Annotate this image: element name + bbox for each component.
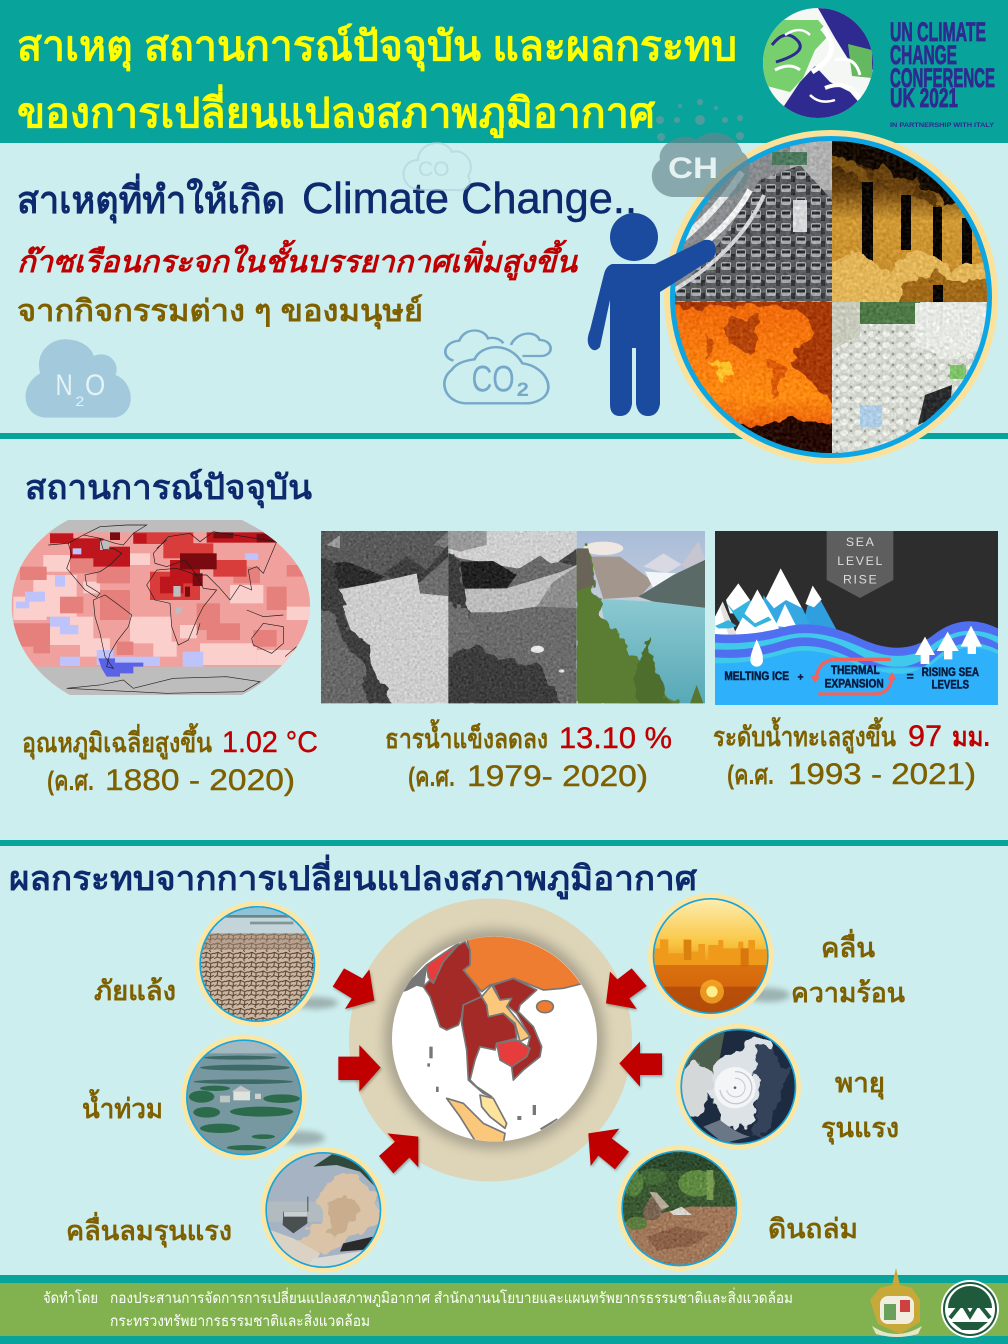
label: heatwave [791, 928, 906, 1008]
country: China [463, 933, 583, 992]
country: India edge [404, 964, 426, 992]
heading: current situation: สถานการณ์ปัจจุบัน [25, 468, 312, 509]
arrow: middle right [619, 1042, 662, 1087]
caption: glaciers: 13.10 % [559, 722, 672, 755]
arrow: bottom left [379, 1133, 418, 1173]
COP26 wordmark: UK 2021 [890, 83, 958, 113]
country: Myanmar [423, 942, 482, 1030]
section divider bars [0, 433, 1008, 846]
caption: sea level: มม. [952, 722, 990, 752]
caption: temperature: 1880 - 2020) [105, 764, 295, 797]
icon: person pointing [588, 213, 716, 416]
gray no-data bands [36, 520, 280, 695]
country: Cambodia [497, 1040, 530, 1067]
icon: N2O cloud: 2 [75, 394, 84, 410]
icon: faint CO2 cloud: CO [418, 158, 450, 181]
central map of Southeast Asia [333, 898, 662, 1182]
footer credit text: กองประสานการจัดการการเปลี่ยนแปลงสภาพภูมิอากาศ สำนักงานนโยบายและแผนทรัพยากรธรรมชาติและสิ่งแวดล้อม [110, 1287, 793, 1307]
label: drought: ภัยแล้ง [94, 976, 176, 1006]
label: storm surge: คลื่นลมรุนแรง [66, 1211, 232, 1248]
caption: sea level [713, 716, 990, 791]
COP26 wordmark: IN PARTNERSHIP WITH ITALY [890, 122, 995, 129]
icon: rising arrows [915, 626, 982, 664]
title: ของการเปลี่ยนแปลงสภาพภูมิอากาศ [17, 84, 656, 139]
photo circle: typhoon [676, 1024, 801, 1149]
label: heatwave: ความร้อน [791, 978, 906, 1008]
diagram labels: EXPANSION [825, 676, 884, 690]
icon: ministry emblem [870, 1268, 922, 1337]
badge: sea level rise: LEVEL [837, 554, 884, 568]
red arrows [333, 968, 662, 1173]
label: severe storm: รุนแรง [821, 1113, 899, 1145]
caption: sea level: ระดับน้ำทะเลสูงขึ้น [713, 716, 896, 754]
photo: glacier 2 [445, 531, 580, 707]
label: severe storm [821, 1068, 899, 1145]
photo: wildfire [675, 302, 832, 453]
footer credit text [43, 1287, 793, 1330]
badge: sea level rise: SEA [846, 535, 876, 549]
subheading: human activities: จากกิจกรรมต่าง ๆ ของมนุษย์ [17, 294, 423, 330]
icon: COP26 globe [763, 8, 873, 118]
diagram labels: MELTING ICE [724, 669, 789, 683]
label: heatwave: คลื่น [821, 928, 876, 963]
caption: glaciers: 1979- 2020) [467, 760, 648, 793]
badge: sea level rise [827, 531, 893, 598]
badge: sea level rise: RISE [843, 572, 878, 586]
photo: factory smoke [832, 141, 987, 302]
label: landslide: ดินถล่ม [768, 1214, 858, 1244]
subheading: greenhouse gases: ก๊าซเรือนกระจกในชั้นบรรยากาศเพิ่มสูงขึ้น [17, 239, 579, 281]
country: Hainan [537, 1001, 553, 1013]
heading: causes [17, 173, 637, 224]
caption: sea level: 97 [908, 720, 942, 753]
title [17, 23, 737, 139]
icon: water drop [750, 639, 763, 667]
label: severe storm: พายุ [835, 1068, 885, 1100]
photo circle: drought [195, 901, 320, 1027]
icon: office seal [941, 1280, 999, 1338]
photo circle: flood [181, 1035, 307, 1160]
footer band [0, 1275, 1008, 1344]
heading: causes: สาเหตุที่ทำให้เกิด [17, 173, 285, 224]
icon: thermal expansion arrows [816, 659, 892, 694]
footer credit text: กระทรวงทรัพยากรธรรมชาติและสิ่งแวดล้อม [110, 1310, 370, 1330]
diagram labels [724, 663, 979, 692]
photo: plastic waste [832, 302, 987, 453]
country: Vietnam [493, 978, 542, 1080]
title: สาเหตุ สถานการณ์ปัจจุบัน และผลกระทบ [17, 23, 737, 72]
photo: traffic jam [660, 140, 832, 302]
COP26 wordmark: CHANGE [890, 40, 957, 70]
diagram labels: = [907, 670, 914, 684]
chart: world temperature anomaly map [10, 518, 312, 697]
photo circle: causes of climate change [650, 130, 1008, 470]
diagram labels: LEVELS [932, 678, 969, 692]
country: Sumatra [447, 1098, 505, 1143]
photo circle: storm surge [261, 1147, 386, 1273]
cold patch over Drake Passage [98, 658, 143, 677]
arrow: top right [606, 968, 647, 1009]
icon: N2O cloud: O [85, 368, 105, 402]
chart: sea level rise diagram [715, 531, 998, 705]
diagram labels: + [798, 673, 804, 684]
heading: impacts: ผลกระทบจากการเปลี่ยนแปลงสภาพภูมิอากาศ [9, 854, 697, 900]
photo: glacier 1 [317, 531, 453, 707]
country: Thailand [462, 997, 517, 1097]
icon: N2O cloud: N [55, 368, 73, 402]
caption: temperature [22, 722, 318, 797]
caption: glaciers [385, 718, 672, 793]
header band [0, 0, 1008, 143]
caption: temperature: อุณหภูมิเฉลี่ยสูงขึ้น [22, 722, 212, 760]
icon: CO2 cloud: CO [471, 358, 515, 400]
COP26 wordmark [890, 17, 995, 129]
icon: icy mountains [715, 568, 841, 637]
country: Laos [482, 985, 530, 1042]
icon: N2O cloud [26, 339, 131, 418]
icon: methane cloud [652, 99, 750, 197]
icon: methane cloud: CH [668, 152, 718, 185]
caption: glaciers: (ค.ศ. [408, 762, 455, 792]
islands [427, 1046, 558, 1130]
icon: CO2 cloud: 2 [517, 379, 529, 401]
heading: causes: Climate Change.. [302, 174, 637, 223]
label: flood: น้ำท่วม [82, 1088, 163, 1124]
caption: sea level: 1993 - 2021) [788, 758, 976, 791]
arrow: top left [333, 968, 374, 1009]
footer credit text: จัดทำโดย [43, 1289, 98, 1307]
caption: sea level: (ค.ศ. [727, 760, 774, 790]
country: Northeast India [427, 943, 458, 983]
icon: CO2 cloud [444, 330, 551, 403]
icon: faint CO2 cloud [403, 143, 471, 190]
arrow: middle left [338, 1045, 381, 1092]
diagram labels: THERMAL [831, 663, 880, 677]
caption: temperature: 1.02 °C [222, 726, 318, 759]
diagram labels: RISING SEA [922, 665, 979, 679]
arrow: bottom right [588, 1129, 629, 1169]
photo circle: heatwave [648, 893, 773, 1019]
icon: sea water [715, 621, 998, 705]
country: Malaysia [480, 1095, 507, 1128]
caption: glaciers: ธารน้ำแข็งลดลง [385, 718, 548, 754]
continent outlines [48, 525, 297, 693]
soft circle shadows [277, 988, 790, 1145]
photo: glacier 3 [573, 531, 708, 707]
caption: temperature: (ค.ศ. [47, 766, 94, 796]
photo circle: landslide [617, 1146, 742, 1271]
